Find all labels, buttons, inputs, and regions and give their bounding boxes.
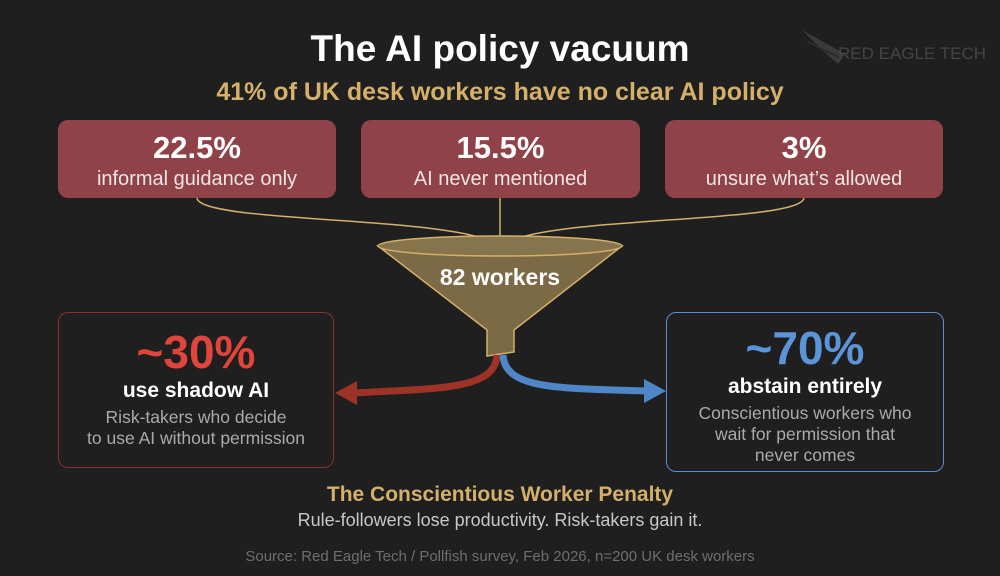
panel: 22.5%: 22.5% bbox=[153, 130, 241, 165]
source: Source: Red Eagle Tech / Pollfish survey, Feb 2026, n=200 UK desk workers bbox=[245, 548, 755, 565]
panel: abstain: wait for permission that bbox=[715, 424, 895, 444]
panel: shadow AI: Risk-takers who decide bbox=[106, 407, 286, 427]
logo: Red Eagle Tech bbox=[802, 30, 986, 64]
panel: shadow AI: use shadow AI bbox=[123, 379, 269, 402]
heading: penalty: The Conscientious Worker Penalty bbox=[327, 483, 673, 506]
panel: 3% bbox=[665, 120, 943, 198]
panel: shadow AI bbox=[58, 312, 334, 468]
panel: shadow AI: to use AI without permission bbox=[87, 428, 305, 448]
panel: abstain: ~70% bbox=[746, 322, 864, 374]
panel: 22.5% bbox=[58, 120, 336, 198]
panel: abstain bbox=[666, 312, 944, 472]
panel: 3%: 3% bbox=[782, 130, 826, 165]
logo: Red Eagle Tech: RED EAGLE TECH bbox=[838, 44, 986, 63]
panel: abstain: never comes bbox=[755, 445, 855, 465]
panel: 3%: unsure what’s allowed bbox=[706, 168, 902, 190]
panel: 15.5%: 15.5% bbox=[457, 130, 544, 165]
funnel label: 82 workers bbox=[440, 264, 560, 290]
panel: 22.5%: informal guidance only bbox=[97, 168, 297, 190]
title: The AI policy vacuum bbox=[310, 28, 690, 69]
arrow: blue to abstain bbox=[503, 355, 666, 403]
panel: 15.5%: AI never mentioned bbox=[414, 168, 587, 190]
panel: 15.5% bbox=[361, 120, 640, 198]
panel: abstain: Conscientious workers who bbox=[698, 403, 912, 423]
funnel bbox=[378, 236, 622, 356]
subtitle: 41% of UK desk workers have no clear AI policy bbox=[216, 78, 784, 106]
panel: abstain: abstain entirely bbox=[728, 375, 882, 398]
text: penalty description: Rule-followers lose productivity. Risk-takers gain it. bbox=[298, 510, 702, 530]
panel: shadow AI: ~30% bbox=[137, 326, 255, 378]
arrow: red to shadow AI bbox=[335, 355, 497, 405]
